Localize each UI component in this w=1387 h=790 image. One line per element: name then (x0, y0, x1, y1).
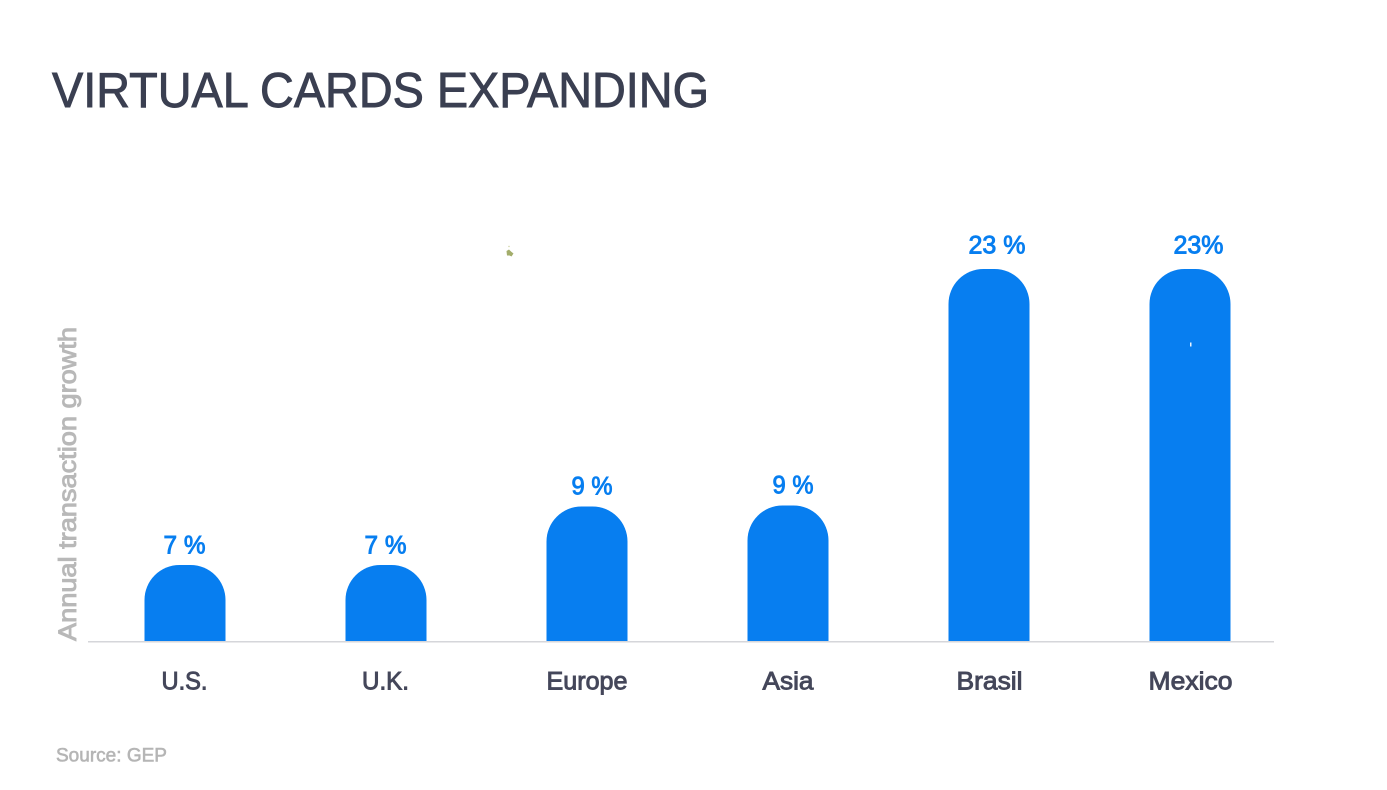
bar: Mexico (1150, 269, 1230, 641)
value: Brasil: 23 % (968, 232, 1026, 260)
category: Europe: Europe (546, 668, 628, 696)
value: Asia: 9 % (772, 472, 814, 500)
bar: U.S. (144, 565, 226, 641)
y-axis label: Annual transaction growth (54, 327, 82, 641)
bar: Asia (748, 506, 828, 641)
title: VIRTUAL CARDS EXPANDING (52, 64, 709, 118)
bar: U.K. (346, 565, 426, 641)
bar: Europe (546, 506, 628, 641)
category: U.K.: U.K. (362, 668, 409, 696)
value: Mexico: 23% (1174, 232, 1224, 260)
value: Europe: 9 % (572, 472, 612, 500)
source note: Source: GEP (56, 744, 167, 766)
stray speck (506, 246, 514, 256)
category: Brasil: Brasil (956, 668, 1022, 696)
category: Mexico: Mexico (1148, 668, 1232, 696)
category: U.S.: U.S. (162, 668, 208, 696)
axis line (88, 641, 1274, 642)
bar chart (88, 232, 1274, 696)
white tick on Mexico bar (1190, 342, 1192, 346)
value: U.K.: 7 % (364, 532, 406, 560)
bar: Brasil (948, 269, 1030, 641)
value: U.S.: 7 % (164, 532, 206, 560)
category: Asia: Asia (762, 668, 814, 696)
